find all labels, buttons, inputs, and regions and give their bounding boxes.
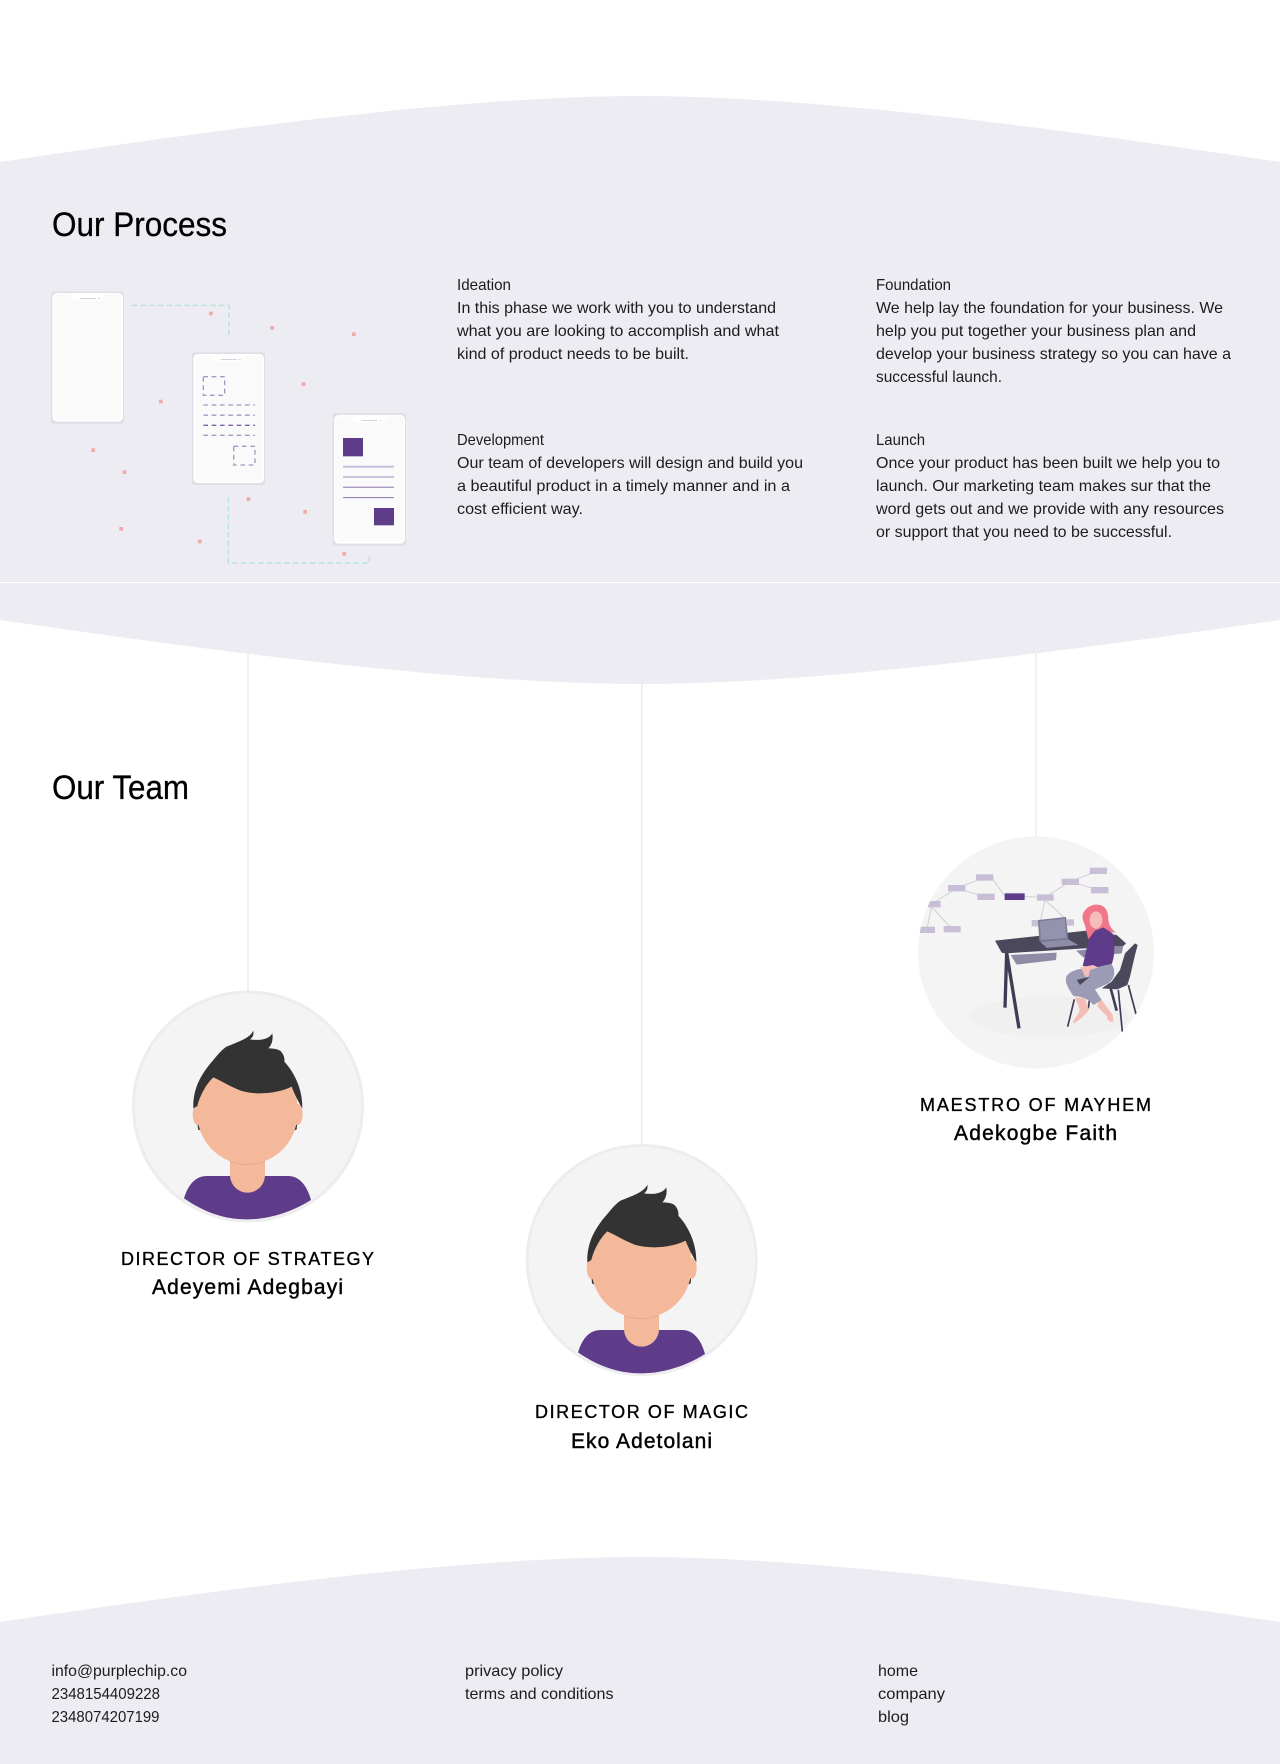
name: Eko Adetolani bbox=[571, 1430, 712, 1453]
process background band bbox=[0, 96, 1280, 684]
ground shadow bbox=[970, 996, 1130, 1037]
team member: Director of Magic bbox=[527, 1146, 756, 1453]
text block: Development: a beautiful product in a timely manner and in a bbox=[457, 478, 790, 495]
text block: Foundation: develop your business strategy so you can have a bbox=[876, 346, 1231, 363]
text block: Ideation: kind of product needs to be built. bbox=[457, 346, 689, 363]
team member: Director of Strategy bbox=[121, 992, 374, 1299]
text block: Development: Development bbox=[457, 432, 545, 449]
footer: navigation links: company bbox=[878, 1686, 945, 1703]
decorative dots bbox=[91, 312, 356, 556]
chair bbox=[1068, 943, 1138, 1032]
text block: Development bbox=[457, 432, 803, 518]
woman bbox=[1066, 905, 1116, 1023]
text block: Foundation: successful launch. bbox=[876, 369, 1002, 386]
text block: Ideation bbox=[456, 277, 780, 363]
phone 2: wireframe bbox=[192, 352, 265, 485]
text block: Foundation bbox=[876, 277, 1231, 386]
connector: phone 1 to phone 2 bbox=[132, 305, 229, 339]
text block: Ideation: Ideation bbox=[457, 277, 511, 294]
desk bbox=[995, 931, 1126, 1028]
text block: Foundation: We help lay the foundation for your business. We bbox=[876, 300, 1223, 317]
text block: Launch bbox=[875, 432, 1224, 541]
text block: Foundation: help you put together your business plan and bbox=[876, 323, 1196, 340]
laptop bbox=[1038, 917, 1078, 948]
text block: Development: cost efficient way. bbox=[457, 501, 583, 518]
text block: Launch: Launch bbox=[876, 432, 925, 449]
footer: contact details: 2348154409228 bbox=[52, 1686, 160, 1703]
footer: contact details: 2348074207199 bbox=[52, 1709, 160, 1726]
footer: navigation links: blog bbox=[878, 1709, 909, 1726]
heading: Our Team: Our Team bbox=[52, 769, 189, 807]
footer: legal links bbox=[465, 1663, 614, 1703]
name: Adeyemi Adegbayi bbox=[152, 1276, 343, 1299]
role label: DIRECTOR OF MAGIC bbox=[535, 1402, 748, 1422]
team member: Maestro of Mayhem bbox=[918, 836, 1154, 1145]
avatar: Eko Adetolani bbox=[527, 1146, 756, 1374]
name: Adekogbe Faith bbox=[954, 1122, 1117, 1145]
avatar: Adeyemi Adegbayi bbox=[134, 992, 362, 1221]
heading: Our Process: Our Process bbox=[52, 206, 227, 244]
text block: Launch: launch. Our marketing team makes sur that the bbox=[876, 478, 1211, 495]
text block: Ideation: In this phase we work with you to understand bbox=[457, 300, 776, 317]
role label: DIRECTOR OF STRATEGY bbox=[121, 1249, 374, 1269]
text block: Foundation: Foundation bbox=[876, 277, 951, 294]
footer: navigation links bbox=[878, 1663, 945, 1726]
phone 3: final design bbox=[333, 413, 406, 546]
text block: Development: Our team of developers will design and build you bbox=[457, 455, 803, 472]
mind map bbox=[920, 868, 1108, 933]
text block: Launch: word gets out and we provide with any resources bbox=[875, 501, 1224, 518]
footer background bbox=[0, 1557, 1280, 1764]
connector: phone 2 to phone 3 bbox=[228, 497, 369, 563]
role label: MAESTRO OF MAYHEM bbox=[920, 1095, 1151, 1115]
text block: Ideation: what you are looking to accomplish and what bbox=[456, 323, 780, 340]
text block: Launch: or support that you need to be successful. bbox=[876, 524, 1172, 541]
phone 1: blank bbox=[51, 292, 124, 424]
illustration: woman at desk with mind map bbox=[918, 836, 1154, 1068]
footer: contact details: info@purplechip.co bbox=[52, 1663, 187, 1680]
text block: Launch: Once your product has been built we help you to bbox=[876, 455, 1220, 472]
vertical connector lines bbox=[248, 640, 1036, 1145]
process illustration: phones bbox=[51, 292, 406, 563]
footer: legal links: privacy policy bbox=[465, 1663, 563, 1680]
footer: legal links: terms and conditions bbox=[465, 1686, 614, 1703]
footer: navigation links: home bbox=[878, 1663, 918, 1680]
footer: contact details bbox=[52, 1663, 187, 1726]
